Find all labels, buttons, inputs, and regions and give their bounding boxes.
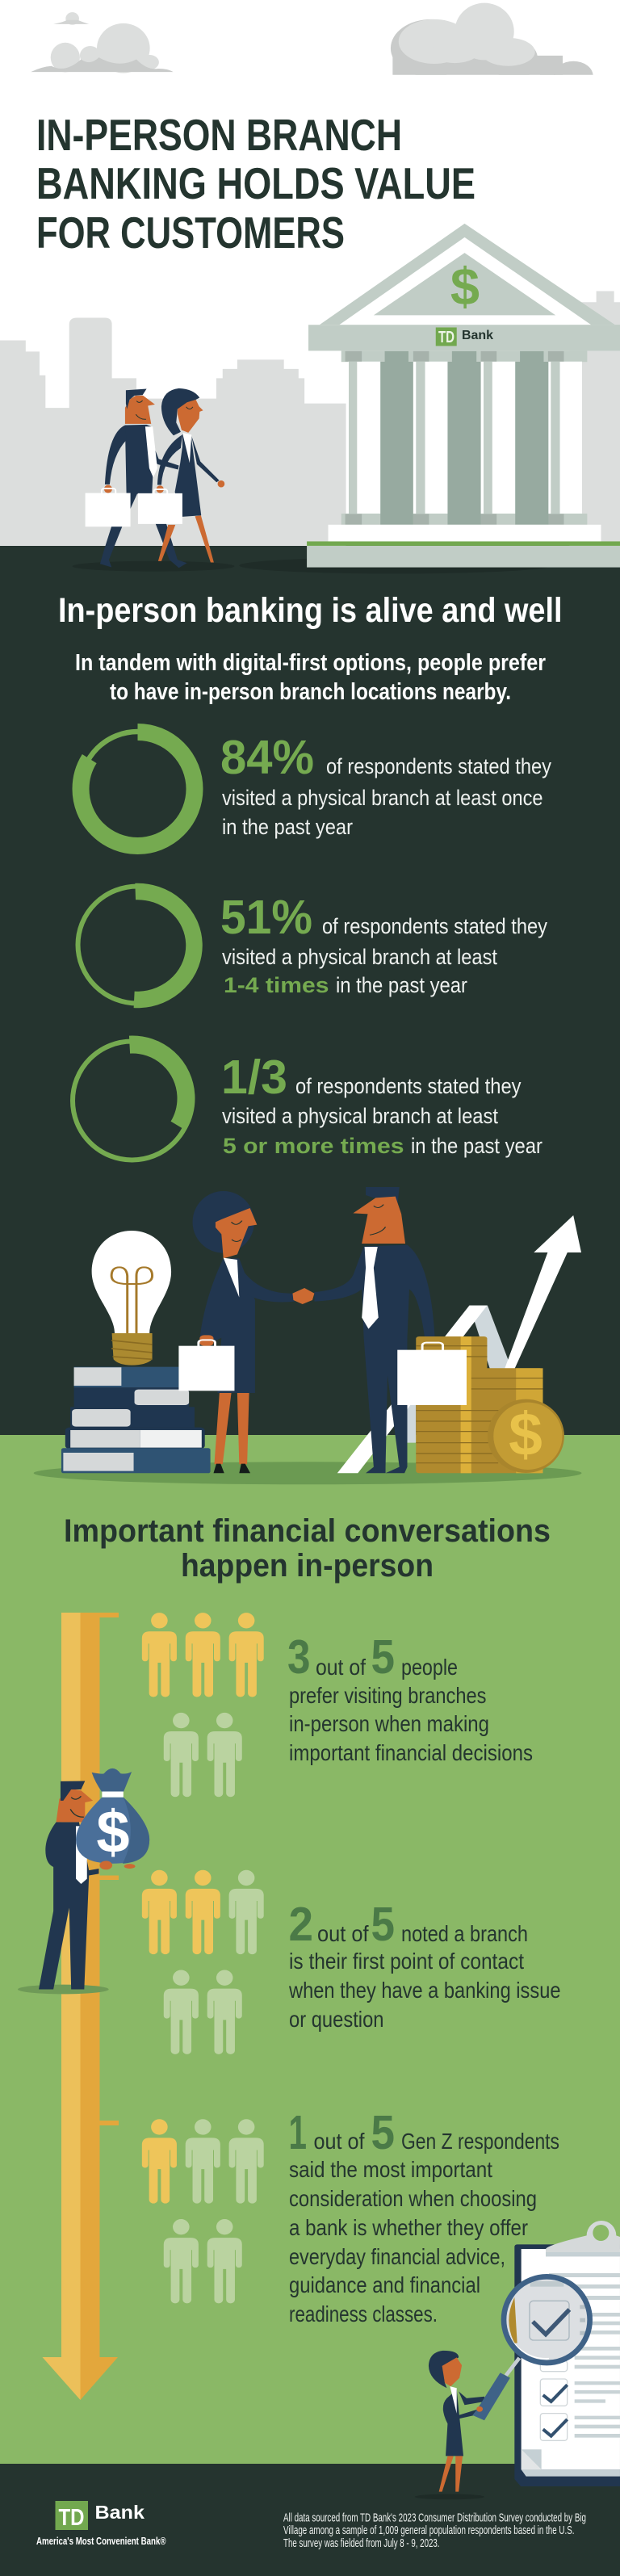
intro text: In tandem with digital-first options, people prefer <box>75 650 546 676</box>
page fold <box>522 2449 542 2469</box>
donut chart: 51% <box>78 887 197 1003</box>
TD logo square <box>436 327 457 346</box>
ground shadows <box>73 561 234 572</box>
clipboard board <box>514 2244 620 2486</box>
left cloud <box>31 23 174 73</box>
ground shadow <box>34 1462 581 1484</box>
heading: financial conversations <box>64 1513 551 1584</box>
base plinths <box>341 514 587 525</box>
stat text: 1 out of 5: 1 <box>289 2106 307 2159</box>
stat text: 84%: in the past year <box>222 815 353 839</box>
icon group: 2 of 5 <box>142 1870 264 2054</box>
stat text: 1 out of 5: guidance and financial <box>289 2272 480 2297</box>
skyline <box>0 291 620 546</box>
clip <box>546 2221 620 2256</box>
briefcases <box>86 489 182 527</box>
stat text: 3 out of 5: prefer visiting branches <box>289 1683 486 1708</box>
icon: growth arrow <box>337 1215 581 1473</box>
background: green section <box>0 1435 620 2465</box>
stat text: 2 out of 5: 2 <box>289 1898 313 1951</box>
woman <box>157 388 224 563</box>
steps <box>329 525 601 542</box>
stat text: 51%: 1-4 times <box>224 973 329 997</box>
bank building <box>307 224 620 568</box>
man <box>100 389 187 568</box>
footer logo: TD <box>58 2505 84 2531</box>
stat text: 3 out of 5: out of <box>316 1655 366 1680</box>
intro text: to have in-person branch locations nearby. <box>110 679 511 705</box>
stat text: 1/3: of respondents stated they <box>295 1074 522 1098</box>
stat text: 2 out of 5: out of <box>317 1921 369 1946</box>
footnote: The survey was fielded from July 8 - 9, 2023. <box>283 2536 439 2550</box>
stat text: 3 out of 5: 5 <box>371 1630 395 1684</box>
timeline arrow <box>42 1613 119 2400</box>
stat text: 2 out of 5 <box>288 1898 560 2032</box>
background: white sky <box>0 0 620 546</box>
icon group: 1 of 5 <box>142 2119 264 2303</box>
stat text: 1/3: 1/3 <box>221 1051 287 1104</box>
footer logo: Bank <box>95 2502 145 2523</box>
stat text: 3 out of 5: 3 <box>287 1630 310 1684</box>
logo: TD Bank on building: Bank <box>462 329 493 342</box>
icon: coin dollar sign: $ <box>509 1400 542 1468</box>
stat text: 84%: visited a physical branch at least once <box>222 786 542 810</box>
stat text: 1 out of 5: consideration when choosing <box>289 2186 537 2211</box>
light columns <box>349 362 357 514</box>
stat text: 3 out of 5: people <box>401 1655 458 1680</box>
footer logo <box>36 2501 166 2547</box>
small capitals <box>346 351 563 525</box>
white column gaps <box>348 362 582 514</box>
checkboxes <box>540 2360 568 2440</box>
check marks <box>543 2385 568 2436</box>
stat text: 2 out of 5: or question <box>289 2007 384 2032</box>
stat text: 2 out of 5: 5 <box>371 1898 395 1951</box>
icon group: 3 of 5 <box>142 1613 264 1797</box>
stat text: 1 out of 5 <box>289 2106 559 2326</box>
title: FOR CUSTOMERS <box>36 208 345 258</box>
dark columns <box>380 351 548 525</box>
title: IN-PERSON BRANCH <box>36 110 402 160</box>
icon: dollar sign on pediment: $ <box>450 257 480 316</box>
couple walking <box>86 388 224 568</box>
icon: coin stacks <box>416 1336 564 1473</box>
icon: money bag dollar sign: $ <box>96 1798 130 1865</box>
donut chart: one third <box>73 1042 191 1160</box>
heading: financial conversations: happen in-person <box>181 1548 434 1584</box>
man holding money bag <box>18 1768 149 1994</box>
intro text <box>75 650 546 705</box>
stat text: 51%: in the past year <box>336 973 467 997</box>
stat text: 2 out of 5: is their first point of contact <box>289 1949 524 1974</box>
stat text: 84%: of respondents stated they <box>326 754 551 778</box>
donut chart: 84% <box>81 732 195 846</box>
header illustration <box>0 3 620 573</box>
heading: financial conversations: Important financial conversations <box>64 1513 551 1549</box>
stat text: 1 out of 5: said the most important <box>289 2157 492 2182</box>
background: dark section <box>0 545 620 1436</box>
stat text: 3 out of 5: important financial decisions <box>289 1740 533 1765</box>
stat text: 2 out of 5: noted a branch <box>401 1921 528 1946</box>
pediment <box>320 224 620 328</box>
stat text: 51%: visited a physical branch at least <box>222 945 497 969</box>
footnote <box>283 2511 586 2550</box>
stat text: 1/3: visited a physical branch at least <box>222 1104 498 1128</box>
stat text: 51%: of respondents stated they <box>322 914 547 938</box>
magnifier <box>504 2276 590 2376</box>
small cloud <box>53 12 89 25</box>
stat text: 51% <box>220 891 547 997</box>
text lines <box>549 2273 620 2438</box>
stat text: 2 out of 5: when they have a banking issue <box>288 1978 560 2003</box>
stat text: 1 out of 5: out of <box>313 2129 365 2154</box>
man shaking hands <box>292 1187 441 1473</box>
clipboard with magnifier <box>504 2221 620 2486</box>
stat text: 51%: 51% <box>220 891 312 944</box>
heading: alive and well: In-person banking is alive and well <box>58 591 562 630</box>
entablature <box>308 325 620 350</box>
logo: TD Bank on building: TD <box>438 329 455 346</box>
stat text: 1/3: 5 or more times <box>223 1134 404 1158</box>
woman shaking hands <box>178 1191 295 1473</box>
stat text: 1 out of 5: 5 <box>371 2106 395 2159</box>
icon: light bulb <box>92 1231 171 1366</box>
woman with magnifier <box>415 2351 510 2499</box>
background: dark footer <box>0 2464 620 2576</box>
stat text: 84% <box>220 731 551 839</box>
stat text: 1/3 <box>221 1051 542 1158</box>
stat text: 3 out of 5 <box>287 1630 533 1765</box>
footer logo: America's Most Convenient Bank® <box>36 2535 166 2547</box>
briefcase <box>397 1343 467 1405</box>
stat text: 84%: 84% <box>220 731 314 784</box>
people icons and characters <box>18 1613 264 2303</box>
title: BANKING HOLDS VALUE <box>36 158 475 208</box>
stat text: 1 out of 5: everyday financial advice, <box>289 2244 505 2269</box>
stat text: 1 out of 5: a bank is whether they offer <box>289 2215 528 2240</box>
handshake illustration <box>34 1187 581 1484</box>
icon: book stack <box>61 1367 211 1473</box>
stat text: 1 out of 5: readiness classes. <box>289 2301 438 2326</box>
right cloud <box>391 3 593 75</box>
stat text: 1 out of 5: Gen Z respondents <box>401 2129 559 2154</box>
logo: TD Bank on building <box>438 329 493 346</box>
stat text: 3 out of 5: in-person when making <box>289 1711 489 1736</box>
title <box>36 110 475 258</box>
stat text: 1/3: in the past year <box>411 1134 542 1158</box>
